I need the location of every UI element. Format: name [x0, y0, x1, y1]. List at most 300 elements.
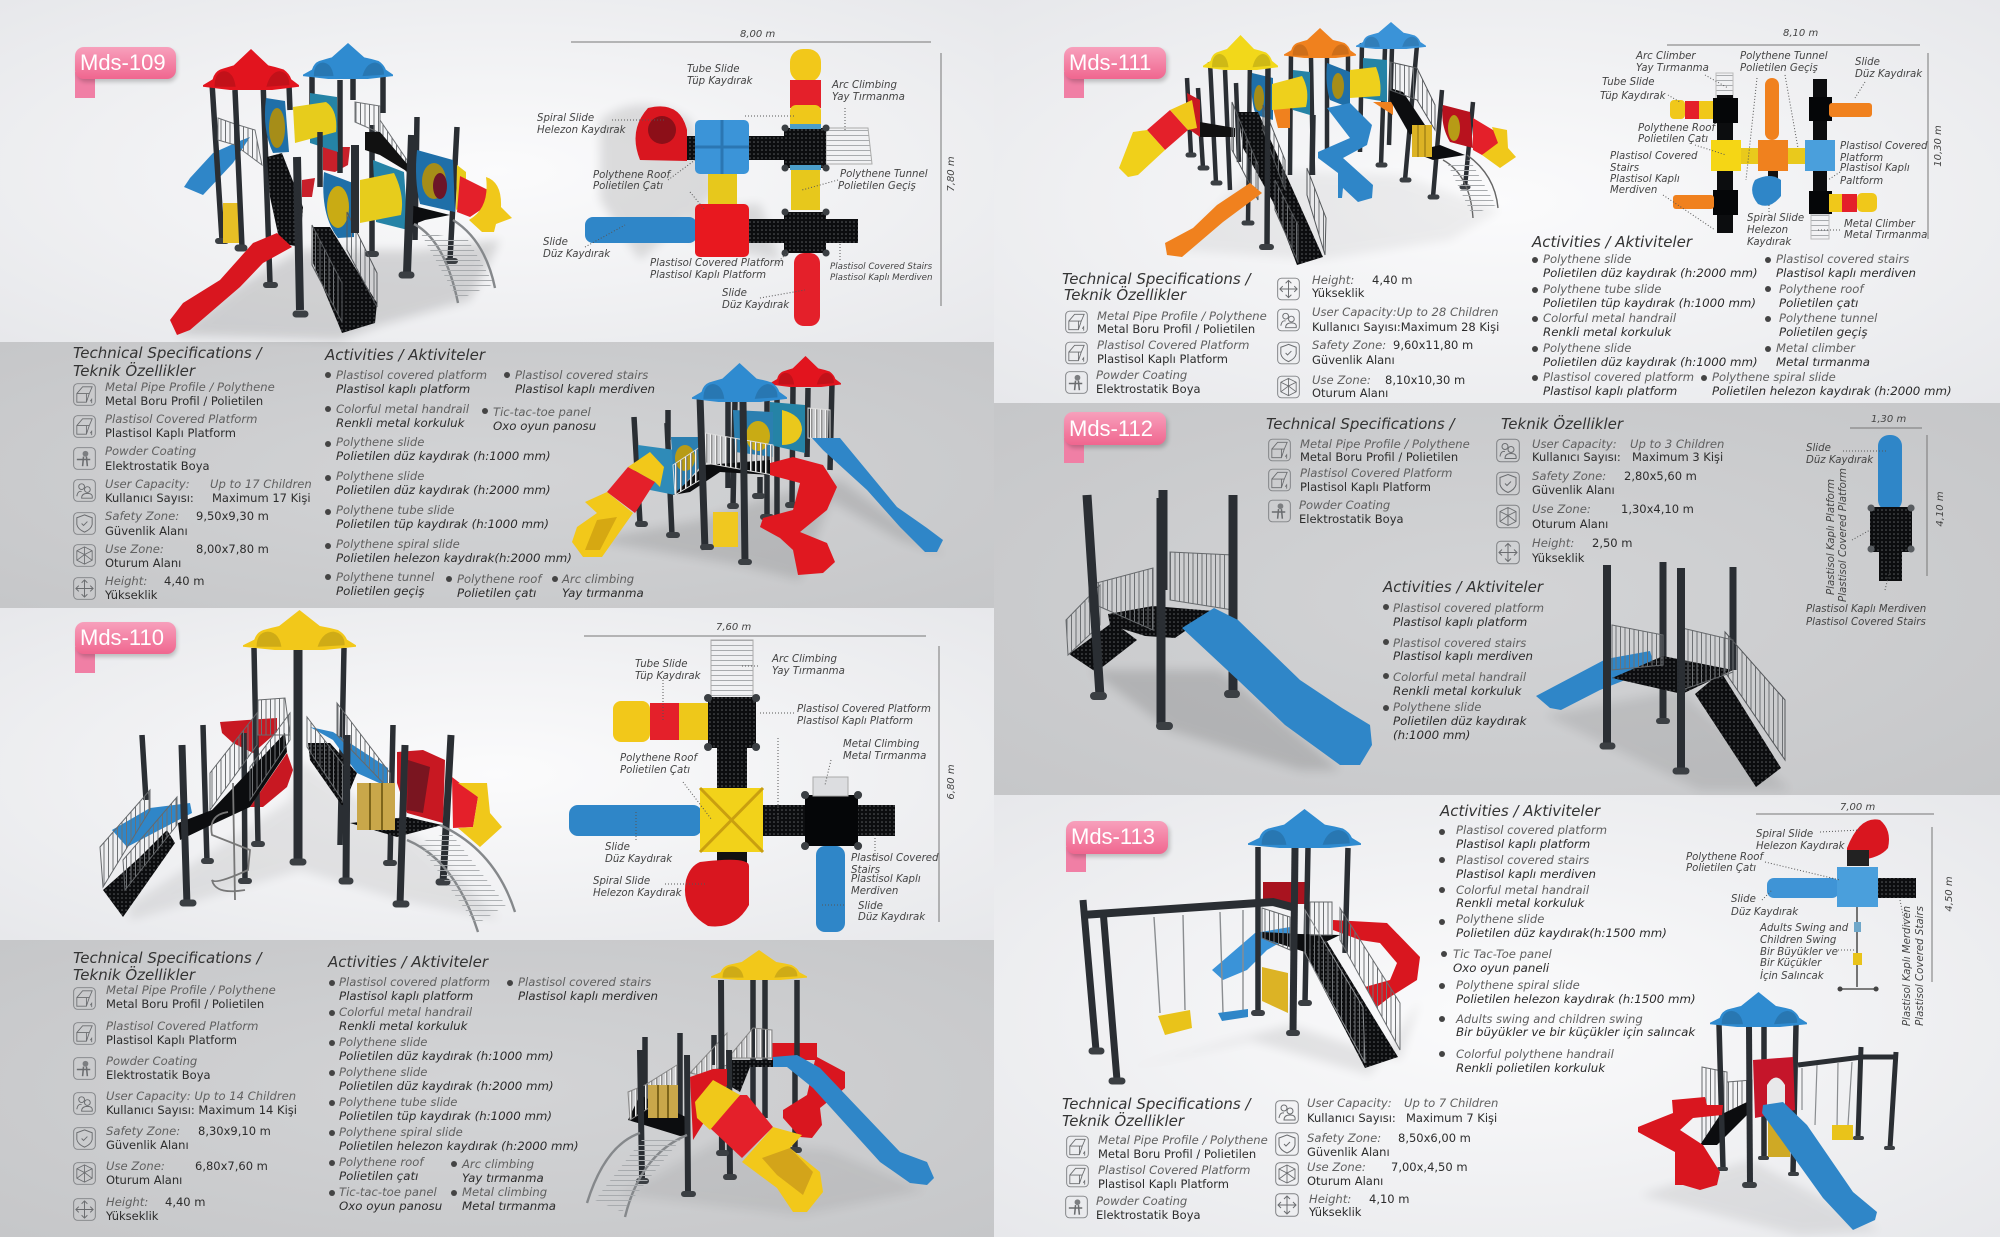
- spec: use zone: [1497, 502, 1694, 531]
- spec: coating: Elektrostatik Boya: [106, 1068, 211, 1082]
- dimension: depth: 7,80 m: [946, 156, 957, 192]
- dimension: width: 1,30 m: [1871, 414, 1906, 425]
- spec: platform: [1067, 1163, 1250, 1191]
- activities list: Renkli metal korkuluk: [1543, 325, 1673, 339]
- activities list: Colorful polythene handrail: [1456, 1047, 1615, 1061]
- activities list: Polietilen helezon kaydırak(h:2000 mm): [336, 551, 572, 565]
- spec: capacity: User Capacity:Up to 28 Children: [1312, 305, 1498, 319]
- activities list: Renkli metal korkuluk: [1393, 684, 1523, 698]
- spec: capacity: Maximum 17 Kişi: [212, 491, 311, 505]
- plan labels: Spiral Slide: [1747, 213, 1804, 224]
- dimension: depth: 4,50 m: [1944, 876, 1955, 912]
- activities list: Arc climbing: [561, 572, 634, 586]
- spec: capacity: Kullanıcı Sayısı: Maximum 14 Kişi: [106, 1103, 297, 1117]
- spec: material: Metal Pipe Profile / Polythene: [105, 380, 275, 394]
- activities list: Polietilen çatı: [339, 1169, 418, 1183]
- activities list: Polythene tunnel: [336, 570, 435, 584]
- activities list: Polythene slide: [339, 1065, 427, 1079]
- plan labels: Polythene Roof: [620, 753, 698, 764]
- plan labels: [537, 64, 933, 311]
- spec: coating: [1066, 368, 1201, 396]
- spec: capacity: Kullanıcı Sayısı:Maximum 28 Kişi: [1312, 320, 1499, 334]
- spec: use zone: Use Zone:: [1532, 502, 1591, 516]
- spec: coating: Elektrostatik Boya: [1096, 1208, 1201, 1222]
- badge: Mds-112: Mds-112: [1069, 416, 1153, 441]
- spec: material: [1067, 1133, 1268, 1161]
- spec: safety zone: [1278, 338, 1473, 367]
- plan labels: Slide: [543, 237, 568, 248]
- dimension: width: 7,60 m: [716, 622, 751, 633]
- plan labels: Plastisol Kaplı Merdiven: [830, 273, 932, 283]
- spec: height: Height:: [106, 1195, 148, 1209]
- spec: coating: Elektrostatik Boya: [105, 459, 210, 473]
- activities list: Polythene spiral slide: [336, 537, 460, 551]
- activities list: Polythene slide: [336, 469, 424, 483]
- panel: Mds-112 background: [994, 403, 2000, 795]
- plan: Mds-113 top view: [1686, 802, 1955, 1026]
- heading: technical specifications: Technical Specifications /: [1062, 1095, 1252, 1113]
- activities list: Polietilen çatı: [1779, 296, 1858, 310]
- activities list: Polythene spiral slide: [1456, 978, 1580, 992]
- activities list: Polythene tube slide: [336, 503, 454, 517]
- plan labels: Düz Kaydırak: [1855, 69, 1923, 80]
- spec: capacity: [1497, 437, 1724, 464]
- spec: platform: [1269, 466, 1452, 494]
- spec: capacity: Kullanıcı Sayısı:: [1532, 450, 1621, 464]
- activities list: Tic Tac-Toe panel: [1453, 947, 1553, 961]
- Mds-113 group: [1062, 802, 1955, 1235]
- spec: coating: Elektrostatik Boya: [1096, 382, 1201, 396]
- plan labels: Tüp Kaydırak: [687, 76, 754, 87]
- plan labels: Children Swing: [1760, 935, 1837, 946]
- activities list: Oxo oyun paneli: [1453, 961, 1550, 975]
- heading: activities: Activities / Aktiviteler: [1439, 802, 1601, 820]
- activities list: Metal tırmanma: [1776, 355, 1870, 369]
- plan labels: Helezon Kaydırak: [593, 888, 683, 899]
- activities list: Polythene spiral slide: [1712, 370, 1836, 384]
- activities list: Yay tırmanma: [462, 1171, 544, 1185]
- heading: technical specifications: [1062, 270, 1252, 304]
- plan labels: Tüp Kaydırak: [1600, 91, 1667, 102]
- illustration: Mds-110 main playground: [100, 610, 515, 932]
- plan labels: Plastisol Kaplı Merdiven: [1806, 604, 1926, 615]
- plan labels: Polietilen Geçiş: [838, 181, 917, 192]
- spec: platform: [1066, 338, 1249, 366]
- spec: height: Height:: [1312, 273, 1354, 287]
- activities list: Polietilen düz kaydırak: [1393, 714, 1528, 728]
- activities list: Plastisol kaplı platform: [339, 989, 473, 1003]
- dimension: depth: 4,10 m: [1935, 491, 1946, 527]
- activities list: Oxo oyun panosu: [339, 1199, 442, 1213]
- activities list: [1383, 601, 1544, 742]
- spec: height: Yükseklik: [1311, 286, 1365, 300]
- spec: capacity: Kullanıcı Sayısı:: [1307, 1111, 1396, 1125]
- activities list: Polietilen düz kaydırak (h:2000 mm): [336, 483, 551, 497]
- activities list: Polythene slide: [1543, 341, 1631, 355]
- spec: capacity: Up to 3 Children: [1630, 437, 1724, 451]
- badge: Mds-113: Mds-113: [1071, 824, 1155, 849]
- plan labels: Polythene Tunnel: [840, 169, 928, 180]
- plan labels: Kaydırak: [1747, 237, 1792, 248]
- spec: coating: Powder Coating: [105, 444, 196, 458]
- spec: height: Height:: [1309, 1192, 1351, 1206]
- spec: use zone: 7,00x,4,50 m: [1391, 1160, 1468, 1174]
- activities list: Polietilen helezon kaydırak (h:2000 mm): [1712, 384, 1952, 398]
- spec: platform: Plastisol Covered Platform: [1098, 1163, 1250, 1177]
- plan labels: Helezon Kaydırak: [537, 125, 627, 136]
- plan labels: Metal Climbing: [843, 739, 920, 750]
- activities list: Plastisol covered stairs: [1456, 853, 1589, 867]
- activities list: Polietilen düz kaydırak (h:1000 mm): [1543, 355, 1758, 369]
- plan labels: Plastisol Covered Platform: [797, 704, 931, 715]
- spec: safety zone: 8,30x9,10 m: [198, 1124, 271, 1138]
- plan labels: Helezon: [1747, 225, 1788, 236]
- plan labels: Plastisol Covered Stairs: [1806, 617, 1926, 628]
- activities list: Polietilen helezon kaydırak (h:1500 mm): [1456, 992, 1696, 1006]
- activities list: Polythene tube slide: [1543, 282, 1661, 296]
- plan labels: Plastisol Covered Platform: [1838, 468, 1849, 602]
- Mds-112 group: [1064, 412, 1946, 790]
- activities list: Arc climbing: [461, 1157, 534, 1171]
- spec: coating: Powder Coating: [1299, 498, 1390, 512]
- spec: capacity: Maximum 7 Kişi: [1406, 1111, 1497, 1125]
- spec: height: 4,40 m: [1372, 273, 1412, 287]
- spec: height: 2,50 m: [1592, 536, 1632, 550]
- spec: safety zone: Safety Zone:: [1312, 338, 1386, 352]
- spec: use zone: Oturum Alanı: [105, 556, 181, 570]
- spec: capacity: Up to 7 Children: [1404, 1096, 1498, 1110]
- spec: platform: Plastisol Kaplı Platform: [1300, 480, 1431, 494]
- panel: Mds-109 specification band: [0, 342, 994, 608]
- spec: use zone: [74, 542, 269, 570]
- plan labels: Yay Tırmanma: [832, 92, 905, 103]
- activities list: [329, 975, 658, 1213]
- panel: Mds-109 render background: [0, 0, 994, 342]
- spec: height: 4,40 m: [164, 574, 204, 588]
- heading: technical specifications: [73, 949, 263, 984]
- plan labels: Plastisol Kaplı: [851, 874, 921, 885]
- spec: height: 4,40 m: [165, 1195, 205, 1209]
- plan labels: Polietilen Geçiş: [1740, 63, 1819, 74]
- Mds-109 group: [73, 29, 957, 602]
- activities list: Polythene slide: [1393, 700, 1481, 714]
- activities list: Plastisol covered stairs: [515, 368, 648, 382]
- activities list: Renkli polietilen korkuluk: [1456, 1061, 1606, 1075]
- heading: technical specifications: Technical Specifications /: [73, 344, 263, 362]
- activities list: Polythene spiral slide: [339, 1125, 463, 1139]
- activities list: Plastisol covered platform: [1543, 370, 1694, 384]
- activities list: Polythene roof: [339, 1155, 425, 1169]
- badge: Mds-111: [1064, 47, 1168, 98]
- heading: activities: Activities / Aktiviteler: [327, 953, 489, 971]
- spec: safety zone: Güvenlik Alanı: [1532, 483, 1615, 497]
- illustration: Mds-113 main playground: [1082, 809, 1420, 1081]
- dimension: depth: 6,80 m: [946, 764, 957, 800]
- spec: safety zone: Safety Zone:: [106, 1124, 180, 1138]
- illustration: Mds-112 front view: [1066, 490, 1372, 770]
- spec: use zone: 6,80x7,60 m: [195, 1159, 268, 1173]
- spec: use zone: 8,00x7,80 m: [196, 542, 269, 556]
- spec: platform: Plastisol Covered Platform: [1097, 338, 1249, 352]
- activities list: [325, 368, 655, 600]
- activities list: Polietilen helezon kaydırak (h:2000 mm): [339, 1139, 579, 1153]
- spec: capacity: User Capacity:: [1307, 1096, 1392, 1110]
- heading: technical specifications: Technical Specifications /: [73, 949, 263, 967]
- heading: technical specifications: Teknik Özellikler: [1064, 285, 1187, 304]
- plan labels: Slide: [1806, 443, 1831, 454]
- plan labels: Plastisol Covered: [1610, 151, 1698, 162]
- plan labels: Merdiven: [1610, 185, 1657, 196]
- plan labels: Plastisol Covered Platform: [650, 258, 784, 269]
- spec: safety zone: Güvenlik Alanı: [1307, 1145, 1390, 1159]
- activities list: Polietilen düz kaydırak(h:1500 mm): [1456, 926, 1667, 940]
- plan labels: Metal Tırmanma: [843, 751, 926, 762]
- panel: Mds-111 background: [994, 0, 2000, 403]
- activities list: Polietilen düz kaydırak (h:2000 mm): [339, 1079, 554, 1093]
- activities list: Plastisol covered stairs: [1776, 252, 1909, 266]
- activities list: Polietilen tüp kaydırak (h:1000 mm): [339, 1109, 552, 1123]
- activities list: Polietilen geçiş: [336, 584, 424, 598]
- spec: capacity: Maximum 3 Kişi: [1632, 450, 1723, 464]
- activities list: Polythene roof: [457, 572, 543, 586]
- spec: height: Yükseklik: [104, 588, 158, 602]
- plan labels: Arc Climber: [1635, 51, 1696, 62]
- plan labels: Polietilen Çatı: [593, 181, 663, 192]
- heading: activities: Activities / Aktiviteler: [1382, 578, 1544, 596]
- plan labels: Metal Climber: [1844, 219, 1916, 230]
- spec: capacity: User Capacity: Up to 14 Children: [106, 1089, 296, 1103]
- activities list: Plastisol kaplı merdiven: [515, 382, 655, 396]
- illustration: Mds-112 rear view: [1536, 562, 1790, 790]
- spec: material: Metal Pipe Profile / Polythene: [1097, 309, 1267, 323]
- spec: platform: [74, 412, 257, 440]
- activities list: (h:1000 mm): [1393, 728, 1470, 742]
- plan labels: [1686, 829, 1926, 1026]
- activities list: Colorful metal handrail: [1543, 311, 1677, 325]
- activities list: Plastisol kaplı merdiven: [1776, 266, 1916, 280]
- spec: use zone: Oturum Alanı: [1307, 1174, 1383, 1188]
- badge: Mds-110: Mds-110: [80, 625, 164, 650]
- Mds-111 group: [1062, 22, 1952, 400]
- spec: safety zone: [74, 1124, 271, 1152]
- activities list: Plastisol kaplı platform: [1393, 615, 1527, 629]
- spec: material: [74, 983, 276, 1011]
- badge: Mds-109: [75, 47, 177, 98]
- plan labels: Spiral Slide: [537, 113, 594, 124]
- spec: material: [74, 380, 275, 408]
- spec: use zone: Use Zone:: [1312, 373, 1371, 387]
- activities list: Colorful metal handrail: [336, 402, 470, 416]
- plan labels: Bir Büyükler ve: [1760, 947, 1838, 958]
- plan labels: Arc Climbing: [831, 80, 897, 91]
- spec: capacity: [1276, 1096, 1498, 1125]
- heading: activities: Activities / Aktiviteler: [324, 346, 486, 364]
- plan labels: Stairs: [851, 865, 881, 876]
- plan labels: Plastisol Covered: [851, 853, 939, 864]
- plan labels: İçin Salıncak: [1760, 969, 1825, 982]
- spec: use zone: Use Zone:: [1307, 1160, 1366, 1174]
- dimension: width: 7,00 m: [1840, 802, 1875, 813]
- spec: height: 4,10 m: [1369, 1192, 1409, 1206]
- activities list: Polietilen düz kaydırak (h:1000 mm): [336, 449, 551, 463]
- spec: safety zone: [1276, 1131, 1471, 1159]
- Mds-110 group: [73, 610, 957, 1223]
- plan labels: Slide: [1855, 57, 1880, 68]
- spec: safety zone: 9,60x11,80 m: [1393, 338, 1473, 352]
- panel: Mds-110 render background: [0, 608, 994, 940]
- panel: Mds-110 specification band: [0, 940, 994, 1237]
- spec: coating: [1066, 1194, 1201, 1222]
- plan labels: Plastisol Kaplı: [1840, 163, 1910, 174]
- spec: height: [1278, 273, 1412, 300]
- heading: technical specifications: Teknik Özellikler: [73, 965, 196, 984]
- activities list: Colorful metal handrail: [1393, 670, 1527, 684]
- spec: coating: Elektrostatik Boya: [1299, 512, 1404, 526]
- spec: safety zone: [74, 509, 269, 538]
- illustration: Mds-110 rear playground: [587, 950, 934, 1217]
- plan labels: Plastisol Kaplı: [1610, 174, 1680, 185]
- spec: height: Yükseklik: [1308, 1205, 1362, 1219]
- activities list: Metal tırmanma: [462, 1199, 556, 1213]
- activities list: Metal climber: [1776, 341, 1856, 355]
- activities list: Polythene slide: [336, 435, 424, 449]
- plan labels: Düz Kaydırak: [543, 249, 611, 260]
- plan labels: Polietilen Çatı: [1638, 134, 1708, 145]
- activities list: Polythene slide: [1543, 252, 1631, 266]
- activities list: Polythene slide: [339, 1035, 427, 1049]
- plan labels: Spiral Slide: [1756, 829, 1813, 840]
- spec: safety zone: Güvenlik Alanı: [106, 1138, 189, 1152]
- spec: use zone: 1,30x4,10 m: [1621, 502, 1694, 516]
- activities list: Plastisol covered stairs: [1393, 636, 1526, 650]
- spec: safety zone: 2,80x5,60 m: [1624, 469, 1697, 483]
- spec: height: Height:: [105, 574, 147, 588]
- spec: safety zone: Güvenlik Alanı: [105, 524, 188, 538]
- badge: Mds-110: [75, 622, 177, 673]
- activities list: Plastisol kaplı merdiven: [518, 989, 658, 1003]
- spec: height: [74, 574, 204, 602]
- spec: safety zone: Safety Zone:: [105, 509, 179, 523]
- spec: height: Yükseklik: [1531, 551, 1585, 565]
- spec: safety zone: 8,50x6,00 m: [1398, 1131, 1471, 1145]
- spec: coating: Powder Coating: [106, 1054, 197, 1068]
- activities list: Oxo oyun panosu: [493, 419, 596, 433]
- spec: safety zone: Safety Zone:: [1532, 469, 1606, 483]
- activities list: [1532, 252, 1952, 398]
- plan labels: Polietilen Çatı: [1686, 863, 1756, 874]
- illustration: Mds-113 rear playground: [1638, 992, 1897, 1235]
- spec: capacity: User Capacity:: [105, 477, 190, 491]
- spec: safety zone: 9,50x9,30 m: [196, 509, 269, 523]
- activities list: Polietilen düz kaydırak (h:1000 mm): [339, 1049, 554, 1063]
- plan: Mds-111 top view: [1600, 28, 1944, 248]
- activities list: Plastisol covered stairs: [518, 975, 651, 989]
- dimension: depth: 10,30 m: [1933, 125, 1944, 167]
- activities list: Polietilen düz kaydırak (h:2000 mm): [1543, 266, 1758, 280]
- spec: material: Metal Pipe Profile / Polythene: [106, 983, 276, 997]
- spec: material: Metal Pipe Profile / Polythene: [1098, 1133, 1268, 1147]
- heading: technical specifications: [1062, 1095, 1252, 1130]
- spec: platform: Plastisol Kaplı Platform: [105, 426, 236, 440]
- spec: platform: Plastisol Kaplı Platform: [1098, 1177, 1229, 1191]
- spec: platform: Plastisol Covered Platform: [105, 412, 257, 426]
- spec: material: Metal Boru Profil / Polietilen: [1097, 322, 1255, 336]
- plan labels: Arc Climbing: [771, 654, 837, 665]
- activities list: Polythene roof: [1779, 282, 1865, 296]
- activities list: Polietilen geçiş: [1779, 325, 1867, 339]
- activities list: Tic-tac-toe panel: [339, 1185, 437, 1199]
- spec: capacity: [1278, 305, 1499, 334]
- spec: material: Metal Boru Profil / Polietilen: [1300, 450, 1458, 464]
- plan labels: Yay Tırmanma: [1636, 63, 1709, 74]
- plan labels: Slide: [722, 288, 747, 299]
- spec: material: Metal Pipe Profile / Polythene: [1300, 437, 1470, 451]
- plan labels: Tube Slide: [635, 659, 688, 670]
- activities list: Colorful metal handrail: [339, 1005, 473, 1019]
- spec: height: Yükseklik: [105, 1209, 159, 1223]
- plan labels: Plastisol Kaplı Platform: [797, 716, 913, 727]
- spec: material: Metal Boru Profil / Polietilen: [1098, 1147, 1256, 1161]
- plan labels: Tube Slide: [687, 64, 740, 75]
- plan labels: Bir Küçükler: [1760, 958, 1822, 969]
- plan: Mds-112 top view: [1806, 414, 1946, 628]
- plan labels: Adults Swing and: [1759, 923, 1849, 934]
- spec: capacity: [74, 1089, 297, 1117]
- plan labels: [593, 654, 939, 923]
- plan labels: [1600, 51, 1928, 248]
- badge: Mds-109: Mds-109: [80, 50, 166, 75]
- spec: use zone: Oturum Alanı: [1532, 517, 1608, 531]
- badge: Mds-113: [1066, 821, 1170, 872]
- heading: technical specifications: Technical Specifications /: [1266, 415, 1456, 433]
- plan labels: Merdiven: [851, 886, 898, 897]
- spec: use zone: 8,10x10,30 m: [1385, 373, 1465, 387]
- plan labels: Helezon Kaydırak: [1756, 841, 1846, 852]
- plan labels: Plastisol Covered: [1840, 141, 1928, 152]
- spec: height: [1276, 1192, 1409, 1219]
- plan labels: Tüp Kaydırak: [635, 671, 702, 682]
- activities list: Polythene slide: [1456, 912, 1544, 926]
- spec: platform: Plastisol Kaplı Platform: [1097, 352, 1228, 366]
- activities list: Plastisol kaplı merdiven: [1393, 649, 1533, 663]
- spec: height: Height:: [1532, 536, 1574, 550]
- plan labels: Düz Kaydırak: [605, 854, 673, 865]
- spec: use zone: [74, 1159, 268, 1187]
- spec: use zone: Oturum Alanı: [1312, 386, 1388, 400]
- activities list: Renkli metal korkuluk: [336, 416, 466, 430]
- spec: use zone: Oturum Alanı: [106, 1173, 182, 1187]
- spec: material: Metal Boru Profil / Polietilen: [106, 997, 264, 1011]
- spec: use zone: Use Zone:: [105, 542, 164, 556]
- spec: use zone: Use Zone:: [106, 1159, 165, 1173]
- heading: technical specifications: Teknik Özellikler: [1062, 1111, 1185, 1130]
- illustration: Mds-111 main playground: [1119, 22, 1516, 265]
- spec: platform: Plastisol Kaplı Platform: [106, 1033, 237, 1047]
- plan labels: Polythene Roof: [593, 170, 671, 181]
- plan labels: Plastisol Kaplı Platform: [1826, 479, 1837, 595]
- spec: material: [1269, 437, 1470, 464]
- activities list: Polietilen çatı: [457, 586, 536, 600]
- heading: technical specifications: Teknik Özellikler: [73, 361, 196, 380]
- plan labels: Polythene Tunnel: [1740, 51, 1828, 62]
- plan labels: Polythene Roof: [1638, 123, 1716, 134]
- spec: coating: [74, 444, 210, 473]
- spec: material: [1066, 309, 1267, 336]
- badge: Mds-111: Mds-111: [1069, 50, 1151, 75]
- activities list: Polythene tube slide: [339, 1095, 457, 1109]
- activities list: Plastisol kaplı merdiven: [1456, 867, 1596, 881]
- spec: use zone: [1278, 373, 1465, 400]
